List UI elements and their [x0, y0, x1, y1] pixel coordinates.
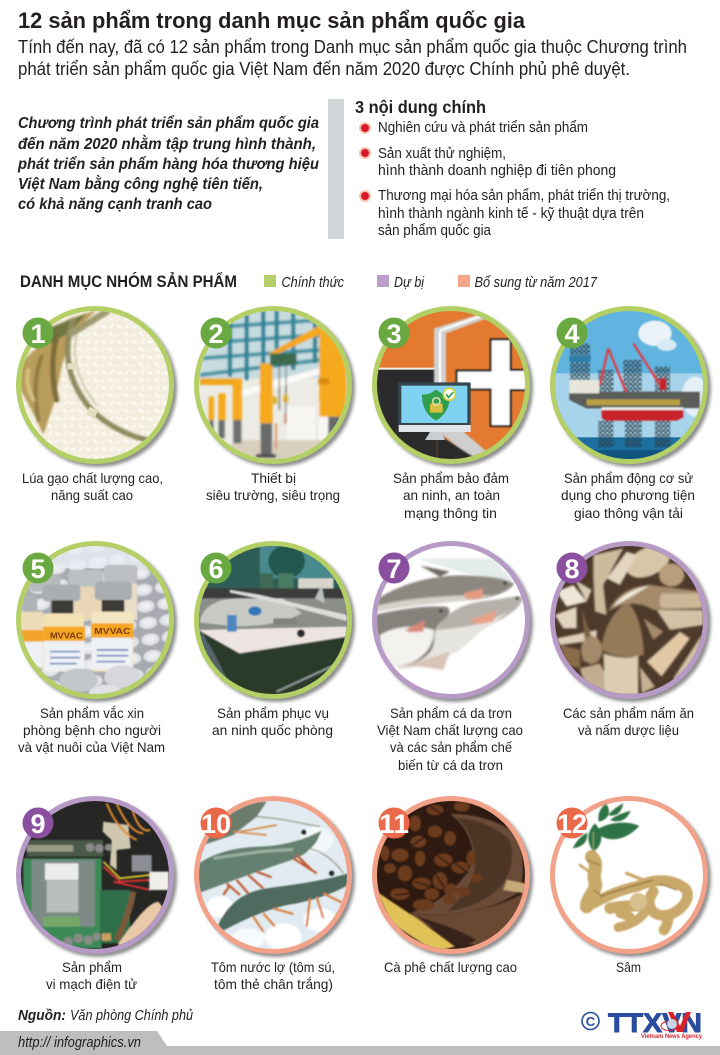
bullet text: hình thành doanh nghiệp đi tiên phong: [378, 163, 616, 179]
agency wordmark: TTXVN: [608, 1008, 702, 1038]
caption 5: [18, 705, 165, 755]
caption 3: mạng thông tin: [404, 505, 497, 521]
bullet text: Thương mại hóa sản phẩm, phát triển thị trường,: [378, 188, 670, 204]
badge 4: 4: [564, 319, 580, 349]
bullet text: hình thành ngành kinh tế - kỹ thuật dựa trên: [378, 206, 644, 222]
caption 11: Cà phê chất lượng cao: [384, 959, 517, 975]
caption 8: và nấm dược liệu: [578, 722, 679, 738]
item 10: shrimp: [193, 796, 355, 957]
caption 3: an ninh, an toàn: [403, 487, 500, 503]
badge 4: [556, 318, 588, 349]
caption 3: [393, 470, 509, 521]
caption 4: giao thông vận tải: [574, 505, 683, 521]
caption 9: [46, 959, 137, 992]
caption 6: Sản phẩm phục vụ: [217, 705, 329, 721]
bullet text: sản phẩm quốc gia: [378, 223, 492, 239]
badge 9: 9: [30, 809, 46, 839]
item 6: defence drone: [193, 541, 355, 702]
footer bar: [0, 1031, 720, 1055]
bullet 2: [359, 147, 371, 159]
caption 8: Các sản phẩm nấm ăn: [563, 705, 694, 721]
legend: Bổ sung từ năm 2017: [474, 275, 598, 291]
caption 2: [206, 470, 340, 503]
caption 1: Lúa gạo chất lượng cao,: [22, 470, 163, 486]
badge 9: [22, 808, 54, 839]
intro text: [18, 36, 687, 79]
caption 7: và các sản phẩm chế: [390, 739, 512, 755]
caption 10: [211, 959, 335, 992]
badge 6: [200, 552, 232, 584]
item 4: oil rig: [547, 306, 711, 467]
badge 2: [200, 318, 232, 349]
bullet text: [378, 120, 670, 239]
badge 3: [378, 318, 410, 349]
caption 6: [212, 705, 333, 738]
section heading: DANH MỤC NHÓM SẢN PHẨM: [20, 272, 237, 291]
caption 4: dụng cho phương tiện: [561, 487, 695, 503]
title: 12 sản phẩm trong danh mục sản phẩm quốc gia: [18, 8, 525, 33]
item 3: network security: [370, 306, 533, 467]
source: [18, 1008, 193, 1024]
caption 10: Tôm nước lợ (tôm sú,: [211, 959, 335, 975]
badge 5: 5: [30, 554, 46, 584]
caption 9: Sản phẩm: [62, 959, 122, 975]
badge 12: 12: [557, 809, 587, 839]
caption 6: an ninh quốc phòng: [212, 722, 333, 738]
caption 5: Sản phẩm vắc xin: [40, 705, 144, 721]
legend: Dự bị: [394, 275, 425, 291]
caption 7: biến từ cá da trơn: [398, 757, 503, 773]
programme summary: [17, 114, 319, 213]
caption 1: năng suất cao: [51, 487, 133, 503]
caption 7: Việt Nam chất lượng cao: [377, 722, 523, 738]
bullet 3: [359, 190, 371, 202]
item 1: rice: [16, 306, 177, 467]
caption 1: [22, 470, 163, 503]
heading: 3 main contents: 3 nội dung chính: [355, 97, 486, 117]
copyright mark: C: [586, 1014, 596, 1029]
legend: [264, 275, 598, 291]
badge 5: [22, 552, 54, 584]
item 9: integrated circuits: [16, 796, 177, 957]
item 5: vaccine: MVVAC: [94, 627, 131, 636]
caption 12: Sâm: [616, 959, 641, 975]
caption 10: tôm thẻ chân trắng): [214, 976, 333, 992]
item 2: crane equipment: [193, 306, 355, 467]
agency tagline: Vietnam News Agency: [641, 1034, 703, 1040]
bullet 1: [359, 122, 371, 134]
badge 10: 10: [201, 809, 231, 839]
item 11: coffee: [370, 796, 533, 957]
caption 3: Sản phẩm bảo đảm: [393, 470, 509, 486]
source: Văn phòng Chính phủ: [70, 1008, 193, 1024]
badge 2: 2: [208, 319, 224, 349]
intro text: phát triển sản phẩm quốc gia Việt Nam đến năm 2020 được Chính phủ phê duyệt.: [18, 58, 630, 79]
badge 8: 8: [564, 554, 580, 584]
programme summary: Chương trình phát triển sản phẩm quốc gia: [18, 114, 319, 132]
bullet text: Nghiên cứu và phát triển sản phẩm: [378, 120, 588, 136]
caption 8: [563, 705, 694, 738]
programme summary: đến năm 2020 nhằm tập trung hình thành,: [18, 134, 316, 153]
caption 7: [377, 705, 523, 773]
badge 7: [378, 552, 410, 584]
item 5: vaccine: MVVAC: [50, 631, 83, 640]
caption 4: [561, 470, 695, 521]
caption 5: và vật nuôi của Việt Nam: [18, 739, 165, 755]
caption 2: siêu trường, siêu trọng: [206, 487, 340, 503]
badge 8: [556, 552, 588, 584]
legend: Chính thức: [282, 275, 345, 291]
website url: http:// infographics.vn: [18, 1035, 141, 1051]
item 5: vaccine: [16, 541, 177, 702]
caption 5: phòng bệnh cho người: [23, 722, 161, 738]
caption 2: Thiết bị: [251, 470, 296, 486]
badge 7: 7: [386, 554, 402, 584]
programme summary: phát triển sản phẩm hàng hóa thương hiệu: [17, 155, 319, 173]
badge 1: 1: [30, 319, 46, 349]
programme summary: có khả năng cạnh tranh cao: [18, 196, 212, 213]
caption 7: Sản phẩm cá da trơn: [390, 705, 512, 721]
item 8: mushrooms: [547, 539, 711, 702]
item 7: catfish: [370, 541, 533, 702]
badge 1: [22, 318, 54, 349]
item 12: ginseng: [550, 796, 711, 957]
source: Nguồn:: [18, 1008, 66, 1024]
caption 4: Sản phẩm động cơ sử: [564, 470, 693, 486]
badge 6: 6: [208, 554, 224, 584]
vertical divider bar: [328, 99, 344, 239]
programme summary: Việt Nam bằng công nghệ tiên tiến,: [18, 174, 263, 193]
caption 9: vi mạch điện tử: [46, 976, 137, 992]
bullet text: Sản xuất thử nghiệm,: [378, 146, 506, 162]
panel: 3 main contents: [355, 97, 670, 239]
red V and globe: [661, 1012, 691, 1032]
badge 11: 11: [379, 809, 409, 839]
badge 3: 3: [386, 319, 402, 349]
logo: TTXVN: [582, 1008, 703, 1040]
